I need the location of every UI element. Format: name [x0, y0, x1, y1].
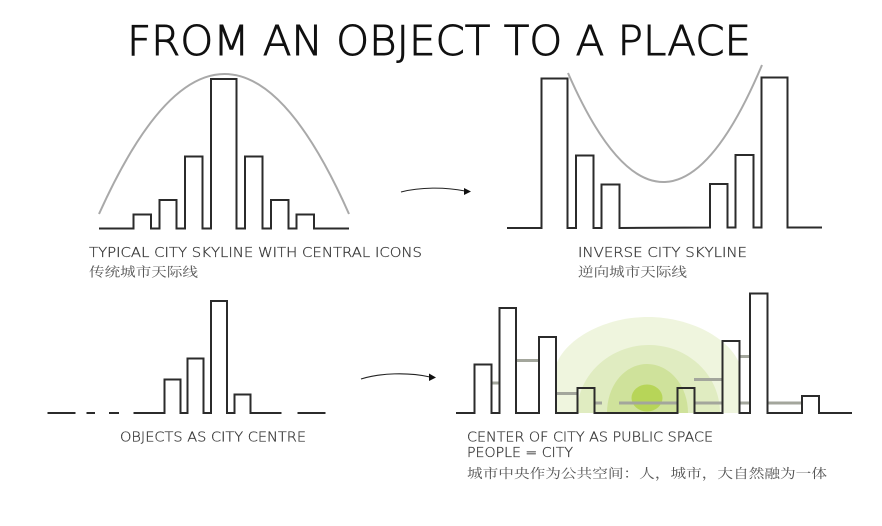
- arrow: top row: [401, 188, 471, 195]
- caption: inverse skyline Chinese: 逆向城市天际线: [578, 264, 687, 280]
- curve: convex skyline arc: [99, 74, 349, 214]
- panel: typical city skyline: [89, 74, 422, 280]
- caption: people equals city: PEOPLE = CITY: [467, 445, 573, 461]
- caption: objects as centre: OBJECTS AS CITY CENTRE: [120, 430, 306, 446]
- green public space rings: [556, 317, 740, 413]
- title: FROM AN OBJECT TO A PLACE: [127, 17, 751, 65]
- panel: center of city as public space: [456, 294, 852, 482]
- skyline: isolated objects with broken ground line: [48, 301, 326, 413]
- arrow: bottom row: [361, 374, 436, 381]
- caption: typical skyline Chinese: 传统城市天际线: [89, 264, 198, 280]
- caption: typical skyline: TYPICAL CITY SKYLINE WITH CENTRAL ICONS: [89, 245, 422, 261]
- people: gray floor bars: [492, 356, 802, 403]
- panel: inverse city skyline: [507, 65, 822, 280]
- panel: objects as city centre: [48, 301, 326, 446]
- skyline: inverse skyline: [507, 78, 822, 228]
- curve: concave skyline arc: [568, 65, 762, 182]
- caption: public space: CENTER OF CITY AS PUBLIC SPACE: [467, 430, 713, 446]
- skyline: city with open centre: [456, 294, 852, 413]
- caption: inverse skyline: INVERSE CITY SKYLINE: [578, 245, 747, 261]
- caption: public space Chinese: 城市中央作为公共空间：人，城市，大自然融为一体: [467, 466, 827, 482]
- skyline: central tower skyline: [99, 79, 349, 228]
